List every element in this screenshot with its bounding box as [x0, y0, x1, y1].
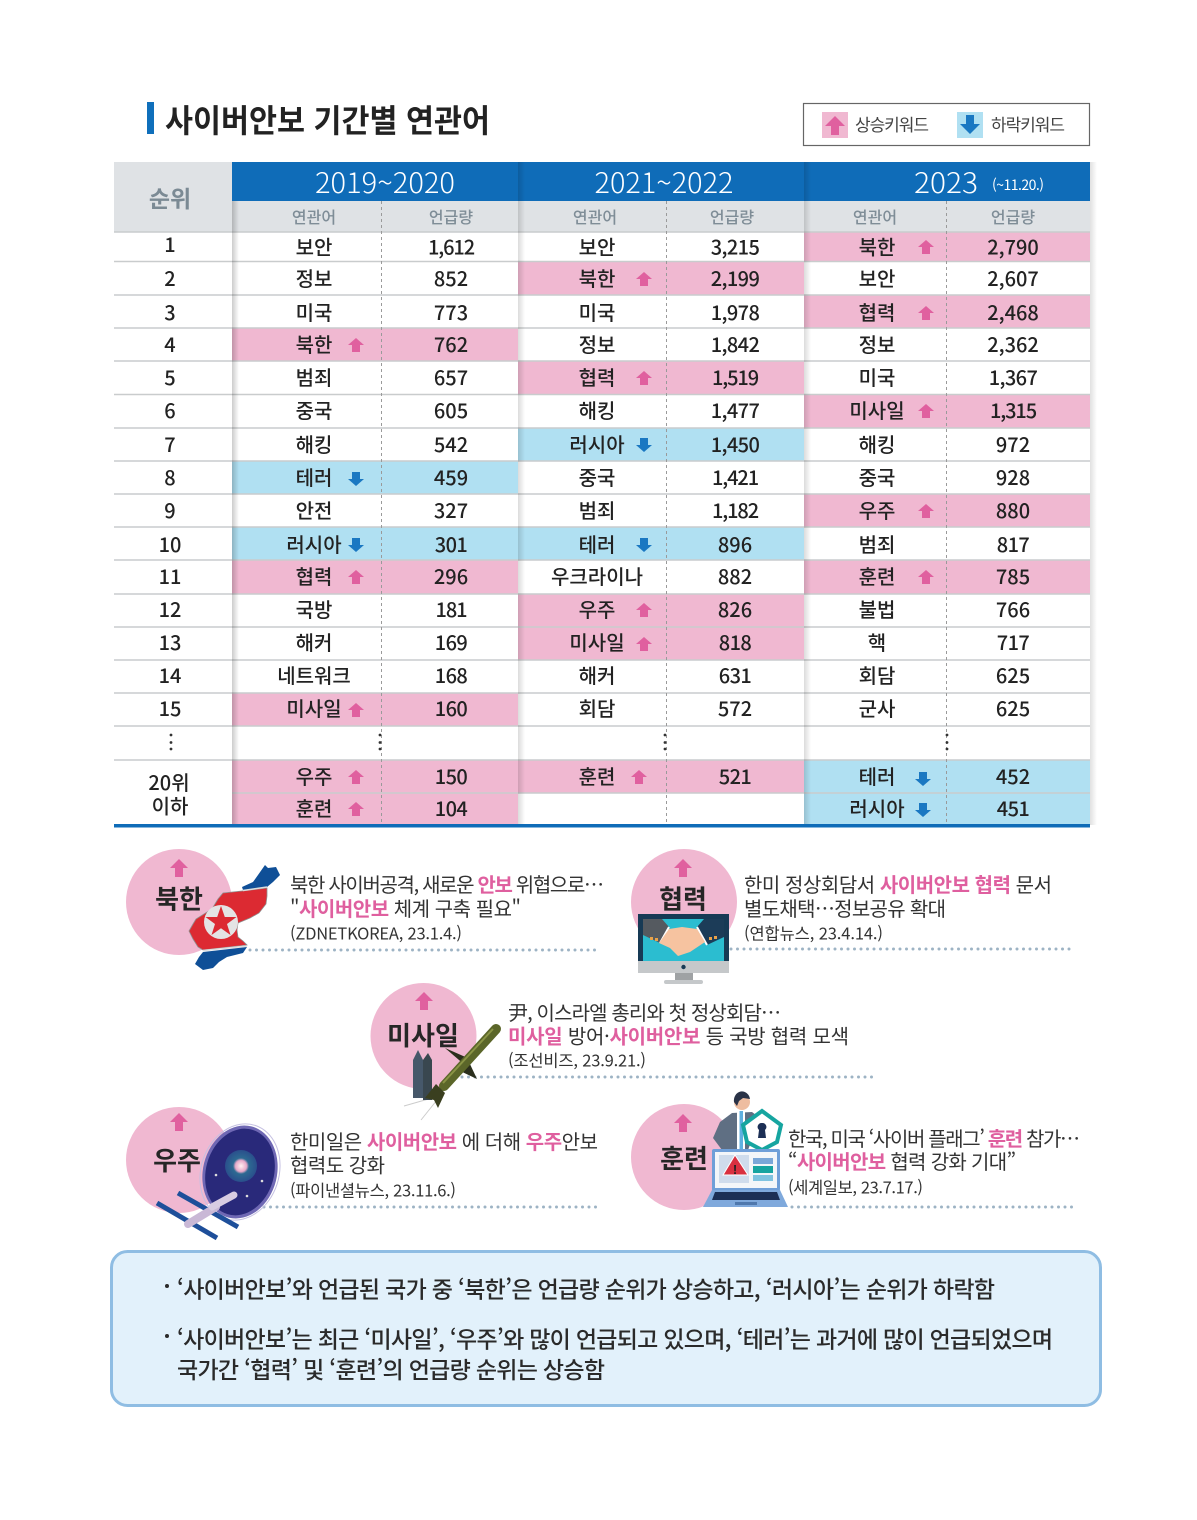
rank 7 row: 7: [164, 429, 176, 458]
rank 20 and below rows: 104: [435, 793, 467, 822]
table header: 순위: [149, 180, 191, 214]
rank 4 row: 1,842: [711, 329, 759, 358]
rank 14 row: 14: [159, 660, 181, 689]
icon: galaxy and space station: [157, 1113, 292, 1238]
rank 8 row: 459: [434, 462, 468, 491]
rank 9 row: 우주: [859, 495, 895, 524]
panel: summary callout: [112, 1252, 1100, 1406]
rank 9 row: 9: [164, 495, 176, 524]
rank 7 row: 542: [434, 429, 468, 458]
panel: 미사일 keyword: [370, 983, 875, 1120]
rank 13 row: 미사일: [569, 627, 625, 656]
rank 10 row: 범죄: [859, 529, 895, 558]
rank 1 row: [164, 229, 1039, 260]
rank 1 row: 3,215: [711, 232, 759, 260]
rank 10 row: 896: [718, 529, 752, 558]
rank 8 row: 1,421: [712, 462, 759, 491]
rank 6 row: 6: [164, 395, 176, 424]
rank 11 row: [159, 561, 1030, 590]
rank 20 and below rows: [148, 761, 1030, 822]
rank 10 row: 817: [997, 529, 1029, 558]
rank 6 row: 미사일: [849, 395, 905, 424]
icon: man, shield and laptop: [703, 1091, 788, 1207]
table header: 2019~2020: [315, 162, 455, 202]
table header: (~11.20.): [992, 175, 1044, 195]
rank 6 row: [164, 395, 1037, 424]
rank 12 row: 826: [718, 594, 752, 623]
table header: [114, 162, 1090, 232]
rank 5 row: 5: [164, 362, 176, 391]
rank 5 row: [164, 362, 1037, 391]
headline: 한미일은 사이버안보 에 더해 우주안보: [290, 1126, 598, 1155]
rank 3 row: 3: [164, 297, 176, 326]
highlighted cells: [232, 232, 1090, 825]
rank 11 row: 785: [996, 561, 1030, 590]
table header: 언급량: [429, 204, 473, 228]
headline: (ZDNETKOREA, 23.1.4.): [290, 920, 462, 944]
rank 13 row: 핵: [868, 627, 886, 656]
summary bullet 2: 국가간 ‘협력’ 및 ‘훈련’의 언급량 순위는 상승함: [177, 1351, 605, 1385]
panel: 훈련 keyword: 훈련: [660, 1139, 708, 1176]
headline: 별도채택…정보공유 확대: [744, 893, 946, 922]
summary bullet 1: ‘사이버안보’와 언급된 국가 중 ‘북한’은 언급량 순위가 상승하고, ‘러시아’는 순위가 하락함: [177, 1270, 995, 1304]
rank 2 row: 정보: [296, 263, 332, 292]
rank 3 row: 협력: [859, 297, 895, 326]
headline: 북한 사이버공격, 새로운 안보 위협으로…: [290, 869, 604, 898]
rank 11 row: 훈련: [859, 561, 895, 590]
rank 6 row: 605: [434, 395, 468, 424]
rank 9 row: 안전: [296, 495, 332, 524]
rank 1 row: 2,790: [987, 232, 1039, 260]
rank 20 and below rows: 이하: [152, 790, 188, 820]
rank 20 and below rows: 우주: [296, 761, 332, 790]
rank 8 row: 중국: [859, 462, 895, 491]
rank 6 row: 중국: [296, 395, 332, 424]
rank 20 and below rows: 521: [719, 761, 751, 790]
table header: 연관어: [573, 204, 617, 228]
rank 20 and below rows: 훈련: [296, 793, 332, 822]
rank 2 row: 2,607: [987, 263, 1039, 292]
rank 12 row: 766: [996, 594, 1030, 623]
rank 9 row: [164, 495, 1030, 524]
headline: 尹, 이스라엘 총리와 첫 정상회담…: [508, 997, 781, 1026]
rank 4 row: 2,362: [987, 329, 1039, 358]
table header: 연관어: [292, 204, 336, 228]
rank 2 row: 보안: [859, 263, 895, 292]
rank 13 row: 717: [997, 627, 1029, 656]
rank 20 and below rows: 훈련: [579, 761, 615, 790]
rank 11 row: 협력: [296, 561, 332, 590]
rank 10 row: 테러: [579, 529, 615, 558]
rank 13 row: 169: [435, 627, 467, 656]
headline: [290, 1126, 598, 1202]
rank 11 row: 296: [434, 561, 468, 590]
headline: 한미 정상회담서 사이버안보 협력 문서: [744, 869, 1052, 898]
rank 13 row: 해커: [296, 627, 332, 656]
rank 2 row: 북한: [579, 263, 615, 292]
rank 8 row: 8: [164, 462, 176, 491]
rank 14 row: 해커: [579, 660, 615, 689]
table header: 언급량: [710, 204, 754, 228]
rank 20 and below rows: 452: [996, 761, 1030, 790]
headline: [788, 1123, 1080, 1198]
headline: [508, 997, 849, 1072]
legend: 하락키워드: [991, 111, 1065, 136]
table header: 연관어: [853, 204, 897, 228]
rank 10 row: 301: [435, 529, 467, 558]
rank 7 row: 1,450: [711, 429, 759, 458]
rank 1 row: 1: [164, 229, 176, 258]
rank 15 row: 미사일: [286, 693, 342, 722]
rank 5 row: 범죄: [296, 362, 332, 391]
rank 8 row: 928: [996, 462, 1030, 491]
headline: (연합뉴스, 23.4.14.): [744, 920, 883, 944]
rank 12 row: [159, 594, 1030, 623]
rank 9 row: 1,182: [712, 495, 759, 524]
legend: 상승키워드: [855, 111, 929, 136]
rank 4 row: 4: [164, 329, 176, 358]
rank 7 row: 러시아: [569, 429, 625, 458]
rank 4 row: [164, 329, 1039, 358]
rank 20 and below rows: 451: [997, 793, 1029, 822]
rank 3 row: 미국: [296, 297, 332, 326]
rank 8 row: [164, 462, 1030, 491]
rank 12 row: 12: [159, 594, 181, 623]
rank 13 row: 818: [719, 627, 751, 656]
table header: 2023: [914, 162, 978, 202]
rank 14 row: 631: [719, 660, 751, 689]
rank 3 row: 2,468: [987, 297, 1039, 326]
rank 15 row: 572: [718, 693, 752, 722]
icon: North Korea flag map: [189, 865, 280, 970]
rank 5 row: 1,519: [712, 362, 759, 391]
rank 5 row: 657: [434, 362, 468, 391]
rank 9 row: 880: [996, 495, 1030, 524]
rank 5 row: 협력: [579, 362, 615, 391]
rank 15 row: 회담: [579, 693, 615, 722]
rank 20 and below rows: 러시아: [849, 793, 905, 822]
rank 12 row: 불법: [859, 594, 895, 623]
rank 9 row: 범죄: [579, 495, 615, 524]
headline: (세계일보, 23.7.17.): [788, 1174, 923, 1198]
rank 15 row: 15: [159, 693, 181, 722]
rank 11 row: 882: [718, 561, 752, 590]
rank 3 row: 1,978: [711, 297, 759, 326]
headline: (조선비즈, 23.9.21.): [508, 1048, 646, 1072]
rank 10 row: [159, 529, 1029, 558]
headline: [744, 869, 1052, 944]
rank 1 row: 보안: [579, 232, 615, 260]
rank 2 row: 852: [434, 263, 468, 292]
rank 14 row: 회담: [859, 660, 895, 689]
table header: 언급량: [991, 204, 1035, 228]
rank 1 row: 1,612: [428, 232, 475, 260]
rank 4 row: 762: [434, 329, 468, 358]
panel: 협력 keyword: [631, 849, 1075, 984]
rank 3 row: 773: [434, 297, 468, 326]
rank 12 row: 181: [436, 594, 467, 623]
rank 8 row: 중국: [579, 462, 615, 491]
rank 20 and below rows: 150: [435, 761, 467, 790]
rank 10 row: 러시아: [286, 529, 342, 558]
rank 4 row: 정보: [859, 329, 895, 358]
headline: "사이버안보 체계 구축 필요": [290, 893, 521, 922]
rank 2 row: 2: [164, 263, 176, 292]
panel: 북한 keyword: [126, 849, 604, 970]
rank 13 row: 13: [159, 627, 181, 656]
panel: 북한 keyword: 북한: [155, 880, 203, 916]
table: [114, 162, 1097, 828]
rank 3 row: 미국: [579, 297, 615, 326]
icon: monitor with handshake: [638, 914, 729, 984]
rank 15 row: [159, 693, 1030, 722]
legend: [804, 104, 1090, 146]
panel: 훈련 keyword: [631, 1091, 1080, 1210]
rank 14 row: 네트워크: [277, 660, 351, 689]
rank 7 row: 해킹: [859, 429, 895, 458]
rank 3 row: [164, 297, 1039, 326]
rank 14 row: 625: [996, 660, 1030, 689]
rank 2 row: [164, 263, 1039, 292]
rank 15 row: 160: [435, 693, 467, 722]
rank 1 row: 보안: [296, 232, 332, 260]
rank 7 row: [164, 429, 1030, 458]
panel: 우주 keyword: [126, 1107, 601, 1238]
rank 6 row: 1,315: [990, 395, 1037, 424]
title: 사이버안보 기간별 연관어: [165, 96, 490, 142]
rank 12 row: 우주: [579, 594, 615, 623]
table header: 2021~2022: [594, 162, 734, 202]
panel: 협력 keyword: 협력: [659, 880, 707, 916]
headline: 미사일 방어·사이버안보 등 국방 협력 모색: [508, 1020, 849, 1050]
rank 2 row: 2,199: [711, 263, 759, 292]
icon: man, shield and laptop: !: [733, 1162, 737, 1177]
rank 1 row: 북한: [859, 232, 895, 260]
summary bullet 2: [165, 1320, 1053, 1385]
rank 20 and below rows: 테러: [859, 761, 895, 790]
rank 11 row: 우크라이나: [551, 561, 643, 590]
rank 5 row: 1,367: [989, 362, 1037, 391]
panel: 미사일 keyword: 미사일: [387, 1016, 459, 1053]
rank 4 row: 정보: [579, 329, 615, 358]
headline: “사이버안보 협력 강화 기대”: [788, 1146, 1016, 1175]
rank 4 row: 북한: [296, 329, 332, 358]
rank 6 row: 해킹: [579, 395, 615, 424]
rank 15 row: 625: [996, 693, 1030, 722]
headline: [290, 869, 604, 944]
ellipsis row: [170, 734, 948, 750]
rank 20 and below rows: 20위: [148, 767, 190, 796]
icon: missile: [404, 1029, 496, 1120]
rank 14 row: [159, 660, 1030, 689]
headline: (파이낸셜뉴스, 23.11.6.): [290, 1178, 456, 1202]
rank 6 row: 1,477: [711, 395, 759, 424]
rank 15 row: 군사: [859, 693, 895, 722]
rank 8 row: 테러: [296, 462, 332, 491]
rank 11 row: 11: [159, 561, 181, 590]
summary bullet 2: ‘사이버안보’는 최근 ‘미사일’, ‘우주’와 많이 언급되고 있으며, ‘테러’는 과거에 많이 언급되었으며: [177, 1320, 1053, 1354]
rank 9 row: 327: [434, 495, 468, 524]
rank 12 row: 국방: [296, 594, 332, 623]
headline: 협력도 강화: [290, 1150, 385, 1178]
rank 14 row: 168: [435, 660, 467, 689]
headline: 한국, 미국 ‘사이버 플래그’ 훈련 참가…: [788, 1123, 1080, 1152]
rank 5 row: 미국: [859, 362, 895, 391]
rank 13 row: [159, 627, 1029, 656]
rank 7 row: 해킹: [296, 429, 332, 458]
rank 10 row: 10: [159, 529, 181, 558]
panel: 우주 keyword: 우주: [153, 1141, 201, 1178]
rank 7 row: 972: [996, 429, 1030, 458]
